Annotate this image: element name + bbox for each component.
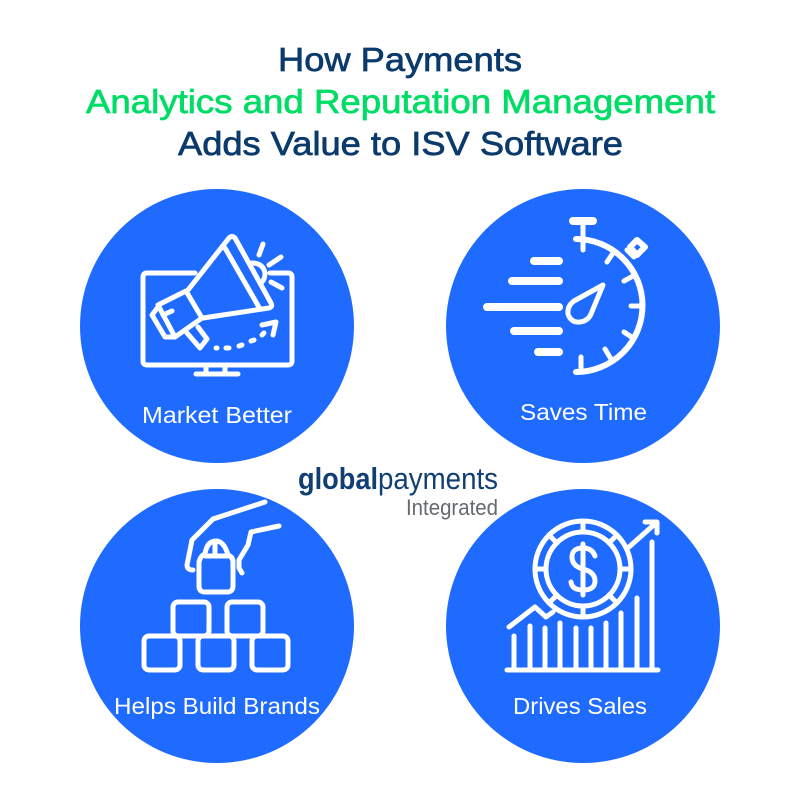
title: How Payments (278, 41, 522, 78)
title: Adds Value to ISV Software (178, 125, 623, 162)
logo: global payments integrated (290, 456, 505, 522)
label: saves time: Saves Time (520, 399, 647, 425)
logo: global payments integrated: Integrated (406, 495, 498, 520)
logo: global payments integrated: payments (378, 461, 498, 496)
panel: saves time (446, 189, 720, 463)
icon: hand placing block (144, 502, 288, 670)
label: drives sales: Drives Sales (513, 693, 647, 719)
icon: stopwatch (487, 221, 645, 372)
panel: helps build brands (80, 489, 354, 763)
panel: drives sales (446, 489, 720, 763)
title: Analytics and Reputation Management (86, 83, 715, 120)
title (86, 41, 715, 162)
label: helps build brands: Helps Build Brands (114, 693, 320, 719)
logo: global payments integrated: global (298, 461, 378, 496)
label: market better: Market Better (142, 402, 292, 428)
icon: megaphone on monitor (143, 236, 292, 374)
panel: market better (80, 189, 354, 463)
icon: dollar coin and growth chart (507, 521, 658, 670)
